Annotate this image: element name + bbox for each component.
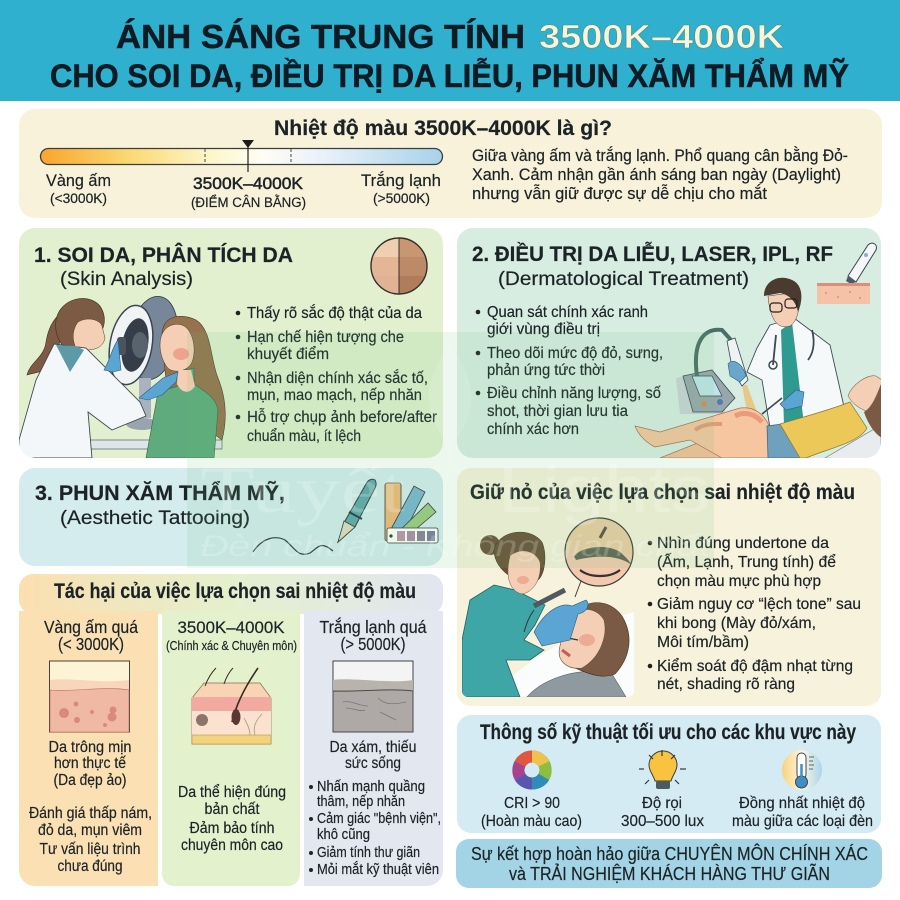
scale label: warm: (<3000K) <box>50 191 107 206</box>
description text: nhưng vẫn giữ được sự dễ chịu cho mắt <box>472 184 767 203</box>
title highlight: colour temperature: 3500K–4000K <box>539 18 784 55</box>
heading: 3. PHUN XĂM THẨM MỸ, <box>35 480 285 505</box>
doctor <box>19 298 178 458</box>
column: too cold: Nhấn mạnh quầng <box>317 779 425 795</box>
bullet list <box>476 304 663 438</box>
column: neutral: (Chính xác & Chuyên môn) <box>166 639 297 653</box>
patient lying down <box>635 376 882 460</box>
spec: illuminance light bulb: Độ rọi <box>642 795 682 812</box>
heading: 1. SOI DA, PHÂN TÍCH DA <box>34 242 293 267</box>
technician <box>462 532 588 697</box>
bullet list: Giảm nguy cơ “lệch tone” sau <box>657 596 861 613</box>
column: too warm: Da trông mịn <box>48 739 132 756</box>
spec: uniform colour temperature thermometer: Đồng nhất nhiệt độ <box>739 795 865 812</box>
title line 1: ÁNH SÁNG TRUNG TÍNH <box>116 18 525 55</box>
bullet list: Nhìn đúng undertone da <box>657 535 829 552</box>
analyser machine <box>108 296 177 430</box>
spec: illuminance light bulb: 300–500 lux <box>621 813 704 830</box>
column: too cold: sức sống <box>345 755 401 772</box>
scale label: balance point: 3500K–4000K <box>193 175 303 193</box>
bullet list <box>236 303 438 445</box>
bullet list: (Ấm, Lạnh, Trung tính) để <box>657 552 836 571</box>
column: too warm: Vàng ấm quá <box>44 617 138 637</box>
bullet list: giới vùng điều trị <box>487 321 600 338</box>
scale label: warm: Vàng ấm <box>46 171 111 190</box>
bullet list <box>648 535 861 693</box>
scale label: cool: Trắng lạnh <box>361 171 441 190</box>
icon: colour swatch fan <box>385 483 438 543</box>
heading <box>35 480 285 529</box>
column: too warm: chưa đúng <box>58 858 122 875</box>
watermark: Tuyết Lights logo <box>187 332 714 568</box>
heading: Tác hại của việc lựa chọn sai nhiệt độ màu <box>54 580 416 603</box>
column: too warm <box>19 611 158 886</box>
watermark: Tuyết Lights logo: Đèn chuẩn - Không gian chất <box>200 530 712 563</box>
column: neutral: 3500K–4000K <box>178 618 285 637</box>
bullet list: Quan sát chính xác ranh <box>487 304 648 321</box>
illustration: doctor using laser on leg <box>635 278 882 460</box>
laser machine <box>676 330 735 414</box>
column: too cold: thâm, nếp nhăn <box>317 794 405 810</box>
spec: uniform colour temperature thermometer: màu giữa các loại đèn <box>732 813 873 830</box>
column: too cold: khô cũng <box>317 827 370 843</box>
watermark: Tuyết Lights logo: Lights <box>498 452 710 526</box>
laser handpiece and beam <box>727 338 757 418</box>
panel: harms of wrong colour temperature <box>19 574 443 886</box>
bullet list: mụn, mao mạch, nếp nhăn <box>247 387 422 404</box>
description text: Xanh. Cảm nhận gần ánh sáng ban ngày (Daylight) <box>472 166 841 184</box>
heading: (Dermatological Treatment) <box>498 269 749 290</box>
panel: 2 dermatological treatment <box>457 228 882 460</box>
skin cross-section diagram <box>192 668 271 744</box>
column: too warm: hơn thực tế <box>54 755 126 772</box>
column: too warm: (Da đẹp ảo) <box>54 772 126 789</box>
exam table <box>90 440 222 450</box>
column: too cold <box>304 611 443 886</box>
scale label: cool <box>361 171 441 206</box>
description text <box>472 146 848 203</box>
bullet list: Hỗ trợ chụp ảnh before/after <box>247 407 438 426</box>
heading: 2. ĐIỀU TRỊ DA LIỄU, LASER, IPL, RF <box>472 240 833 266</box>
illustration: technician tattooing eyebrows <box>462 532 634 697</box>
icon: skin tone disc <box>371 238 427 294</box>
column: too cold: Mỏi mắt kỹ thuật viên <box>317 861 439 878</box>
panel: keeping correct colour temperature for tattooing <box>457 468 881 706</box>
column: too warm: đỏ da, mụn viêm <box>38 822 142 839</box>
bullet list: chuẩn màu, ít lệch <box>247 427 361 445</box>
bullet list: Hạn chế hiện tượng che <box>247 329 404 346</box>
column: neutral: bản chất <box>204 801 260 818</box>
warm skin swatch <box>50 661 130 732</box>
bullet list: shot, thời gian lưu tia <box>487 403 628 420</box>
illustration: doctor analysing patient skin <box>19 292 225 458</box>
icon: tattoo pen with ink line <box>253 479 376 554</box>
bullet list: Thấy rõ sắc độ thật của da <box>247 303 422 322</box>
patient <box>146 316 225 458</box>
column: too cold: Trắng lạnh quá <box>320 616 427 637</box>
icon: laser pen on skin <box>817 243 876 304</box>
panel: optimal technical specifications <box>457 715 881 833</box>
cold skin swatch <box>333 661 413 732</box>
bullet list: Kiểm soát độ đậm nhạt từng <box>657 657 853 675</box>
column: too cold: (> 5000K) <box>340 634 406 654</box>
panel: 1 skin analysis <box>19 228 443 458</box>
spec: CRI colour wheel: (Hoàn màu cao) <box>481 813 582 830</box>
column: neutral: chuyên môn cao <box>181 837 283 854</box>
bullet list: Theo dõi mức độ đỏ, sưng, <box>487 345 663 362</box>
column: neutral: Đảm bảo tính <box>190 820 274 837</box>
magnified eyebrow inset <box>565 518 633 597</box>
heading: Nhiệt độ màu 3500K–4000K là gì? <box>274 116 612 140</box>
bullet list: chính xác hơn <box>487 421 579 438</box>
closing banner <box>456 839 882 888</box>
bullet list: nét, shading rõ ràng <box>657 676 795 693</box>
column: too cold: Cảm giác "bệnh viện", <box>317 811 441 827</box>
title line 2: CHO SOI DA, ĐIỀU TRỊ DA LIỄU, PHUN XĂM THẨM MỸ <box>50 58 849 94</box>
pillow and patient <box>512 602 634 697</box>
column: too warm: Tư vấn liệu trình <box>40 841 140 858</box>
description text: Giữa vàng ấm và trắng lạnh. Phổ quang cân bằng Đỏ- <box>472 146 848 165</box>
bullet list: phản ứng tức thời <box>487 362 605 379</box>
heading: Giữ nỏ của việc lựa chọn sai nhiệt độ màu <box>470 481 855 504</box>
spec: CRI colour wheel <box>481 756 582 830</box>
spec: CRI colour wheel: CRI > 90 <box>504 795 560 812</box>
spec: illuminance light bulb <box>621 750 704 830</box>
scale label: balance point <box>191 175 306 210</box>
panel: colour temperature explanation <box>19 109 882 218</box>
bullet list: khuyết điểm <box>247 345 329 363</box>
bullet list: khi bong (Mày đỏ/xám, <box>657 615 816 632</box>
bullet list: Môi tím/bầm) <box>657 634 749 651</box>
spec: uniform colour temperature thermometer <box>732 750 873 830</box>
doctor <box>747 278 847 430</box>
column: too warm: (< 3000K) <box>58 634 124 654</box>
closing banner: và TRẢI NGHIỆM KHÁCH HÀNG THƯ GIÃN <box>509 863 830 884</box>
heading <box>34 242 293 290</box>
column: neutral <box>162 611 300 886</box>
scale label: warm <box>46 171 111 206</box>
heading: (Skin Analysis) <box>60 269 193 290</box>
column: too cold: Da xám, thiếu <box>330 739 416 756</box>
header banner <box>0 0 900 101</box>
scale label: balance point: (ĐIỂM CÂN BẰNG) <box>191 195 306 210</box>
bullet list: chọn màu mực phù hợp <box>657 573 821 590</box>
colour temperature scale bar <box>40 140 442 172</box>
column: too warm: Đánh giá thấp nám, <box>29 805 152 822</box>
panel: 3 aesthetic tattooing <box>19 468 443 566</box>
bullet list: Điều chỉnh năng lượng, số <box>487 385 661 402</box>
scale label: cool: (>5000K) <box>373 191 430 206</box>
watermark: Tuyết Lights logo: Tuyết <box>200 454 405 527</box>
bullet list: Nhận diện chính xác sắc tố, <box>247 368 428 387</box>
heading <box>472 240 833 290</box>
column: neutral: Da thể hiện đúng <box>178 784 286 801</box>
column: too cold: Giảm tính thư giãn <box>317 845 420 861</box>
heading: (Aesthetic Tattooing) <box>60 508 250 529</box>
